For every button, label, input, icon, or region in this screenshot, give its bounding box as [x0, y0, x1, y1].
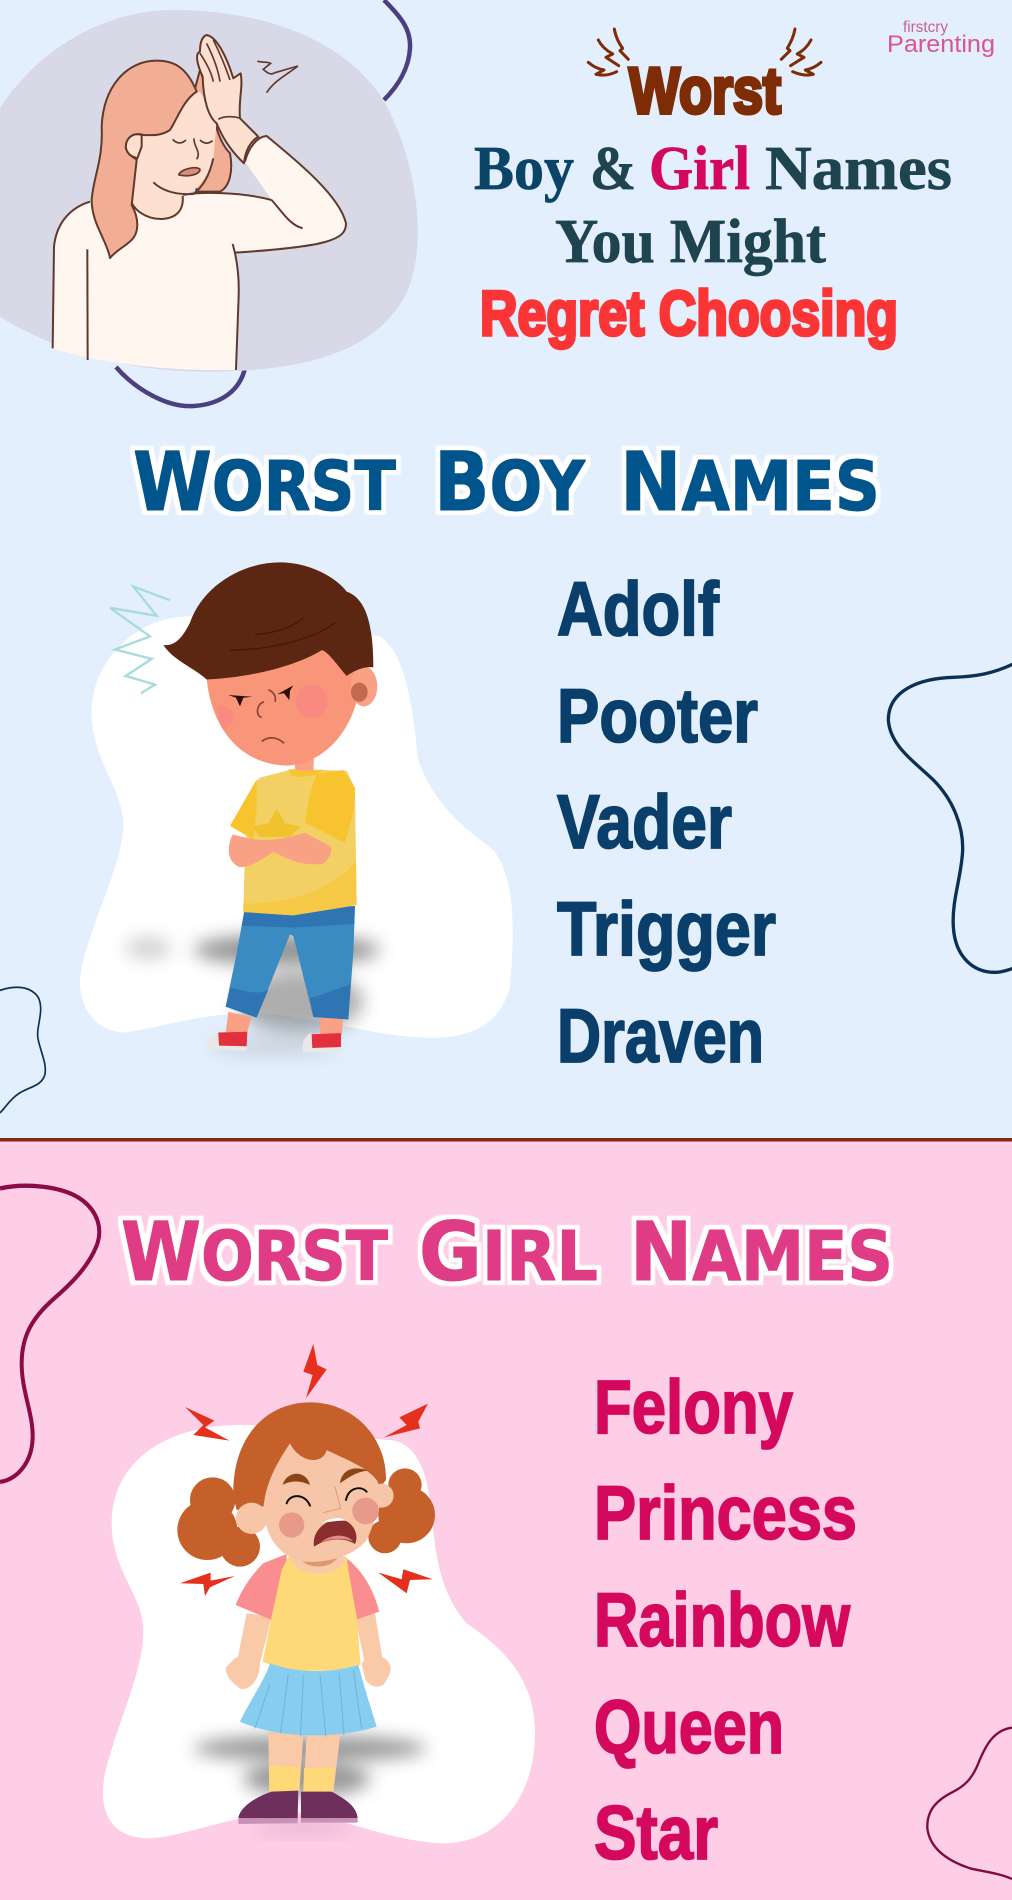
neck	[295, 759, 314, 771]
soles	[238, 1818, 358, 1824]
eyes	[228, 685, 293, 706]
list: boy names	[557, 567, 776, 1079]
legs	[268, 1732, 341, 1793]
illustration: girl with hand on forehead	[0, 10, 418, 372]
list: girl names: Princess	[594, 1471, 857, 1556]
decorative curve: left crimson	[0, 1186, 99, 1482]
face	[263, 1443, 379, 1562]
heading: Worst Girl Names: GIRL	[419, 1206, 598, 1300]
neck	[289, 1557, 346, 1574]
title line: Regret Choosing: Regret Choosing	[480, 279, 898, 349]
panel: boy section background	[0, 0, 1012, 1139]
heading: Worst Boy Names: NAMES	[620, 436, 880, 530]
heading: Worst Boy Names	[133, 436, 880, 530]
logo: FirstCry Parenting	[887, 19, 995, 58]
white blob	[103, 1425, 535, 1843]
sleeve folds	[87, 200, 303, 360]
list: boy names: Vader	[557, 780, 732, 865]
jeans dark cuffs and waist	[226, 906, 355, 1019]
shadows	[125, 934, 380, 1055]
sweater fill	[53, 136, 346, 370]
socks	[269, 1765, 335, 1792]
list: girl names: Felony	[594, 1365, 793, 1450]
ear	[126, 134, 142, 158]
sleeves	[236, 1554, 379, 1620]
shoes	[208, 1032, 341, 1052]
frustration mark	[257, 61, 298, 93]
list: girl names: Star	[594, 1791, 718, 1876]
hair lines	[230, 617, 335, 650]
decorative curve: bottom right crimson	[927, 1728, 1012, 1879]
title word: Girl: Girl	[649, 135, 750, 203]
list: boy names: Trigger	[557, 887, 776, 972]
heading: Worst Girl Names	[121, 1206, 893, 1300]
jeans	[226, 906, 355, 1019]
title word: ampersand: &	[590, 135, 636, 203]
hand and forearm	[197, 35, 258, 163]
eyes	[287, 1488, 367, 1506]
open mouth	[179, 168, 200, 176]
pigtails	[177, 1468, 435, 1567]
heading: Worst Girl Names: NAMES	[630, 1206, 893, 1300]
list: girl names	[594, 1365, 857, 1876]
neck shadow	[298, 1557, 338, 1567]
skirt pleats	[255, 1670, 362, 1737]
list: boy names: Draven	[557, 994, 764, 1079]
teeth	[322, 1518, 347, 1523]
front hair	[92, 61, 197, 258]
closed eyes, nose, mouth	[173, 138, 213, 159]
logo: firstcry: firstcry	[903, 19, 948, 36]
tongue	[320, 1536, 353, 1543]
hair	[163, 562, 373, 679]
sweater outline	[53, 136, 346, 370]
neck and face	[132, 92, 217, 218]
panel: girl section background	[0, 1141, 1012, 1900]
section divider	[0, 1138, 1012, 1142]
lightning bolts	[180, 1344, 433, 1596]
nose	[323, 1487, 341, 1513]
eyebrows	[283, 1468, 368, 1485]
star	[252, 809, 301, 837]
fists	[226, 1656, 391, 1689]
ear	[351, 666, 377, 706]
arms	[237, 1613, 383, 1663]
decorative curve: top purple	[384, 0, 410, 100]
list: boy names: Pooter	[557, 674, 758, 759]
back hair	[187, 70, 231, 192]
shirt	[243, 769, 357, 915]
logo: Parenting: Parenting	[887, 31, 995, 58]
shirt	[263, 1557, 361, 1671]
title block	[474, 29, 952, 349]
decorative curve: bottom purple	[116, 367, 245, 406]
list: girl names: Queen	[594, 1685, 784, 1770]
heading: Worst Boy Names: BOY	[434, 436, 586, 530]
title word: Boy: Boy	[474, 135, 574, 203]
title line: You Might: You Might	[555, 208, 826, 276]
finger lines	[200, 40, 241, 119]
hair	[233, 1402, 386, 1510]
shadows	[193, 1735, 427, 1833]
rays around Worst	[588, 29, 821, 75]
cheeks	[296, 685, 328, 718]
shoes	[238, 1791, 358, 1818]
white blob	[80, 616, 513, 1038]
neck line	[130, 158, 213, 219]
zigzag mark beside boy	[110, 586, 170, 693]
crossed arms	[229, 833, 331, 867]
mouth	[314, 1518, 356, 1547]
collar	[288, 769, 323, 777]
skirt	[240, 1663, 377, 1735]
heading: Worst Girl Names: WORST	[121, 1206, 388, 1300]
grey-lilac blob	[0, 10, 418, 372]
legs	[226, 1012, 343, 1035]
list: boy names: Adolf	[557, 567, 720, 652]
list: girl names: Rainbow	[594, 1578, 851, 1663]
illustration: angry girl	[103, 1344, 535, 1843]
decorative curve: right navy	[888, 664, 1012, 972]
title word: Worst: Worst	[629, 54, 781, 127]
decorative curve: left navy thin	[0, 987, 45, 1113]
head	[207, 609, 360, 766]
heading: Worst Boy Names: WORST	[133, 436, 396, 530]
nose and mouth	[257, 690, 284, 743]
cheeks	[279, 1512, 304, 1538]
shirt shade	[243, 860, 357, 915]
ear	[236, 1503, 267, 1534]
illustration: angry boy	[80, 562, 513, 1055]
sleeves	[230, 770, 355, 843]
title word: Names: Names	[765, 135, 952, 203]
